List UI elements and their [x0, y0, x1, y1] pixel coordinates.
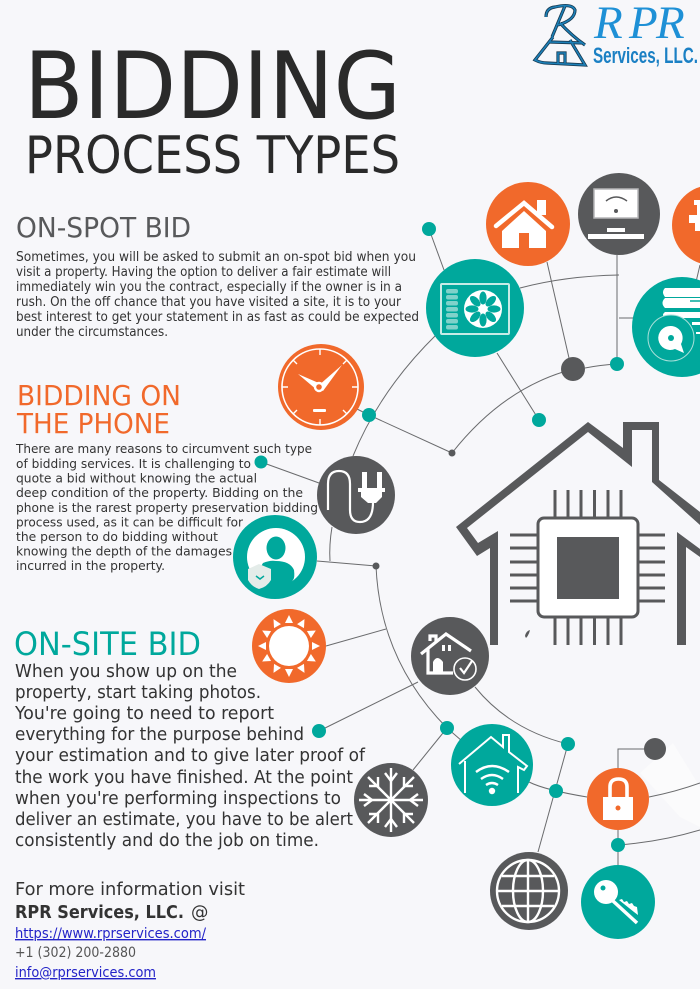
- text block: bidding on the phone: process used, as it can be difficult for: [16, 516, 244, 530]
- title: BIDDING: [24, 32, 401, 140]
- text block: bidding on the phone: phone is the rarest property preservation bidding: [16, 501, 318, 516]
- text block: on-site bid: [14, 662, 366, 851]
- icon: laptop: [578, 173, 660, 255]
- heading: bidding on the phone: THE PHONE: [16, 408, 170, 440]
- icon: home: [486, 182, 570, 266]
- text block: on-spot bid: under the circumstances.: [16, 325, 168, 340]
- text block: bidding on the phone: of bidding services. It is challenging to: [16, 457, 251, 472]
- heading: bidding on the phone: [16, 380, 181, 440]
- text block: on-site bid: You're going to need to report: [14, 704, 274, 724]
- text block: on-spot bid: Sometimes, you will be asked to submit an on-spot bid when you: [16, 250, 416, 265]
- text block: on-spot bid: rush. On the off chance that you have visited a site, it is to your: [16, 295, 402, 310]
- text block: on-spot bid: best interest to get your statement in as fast as could be expected: [16, 310, 419, 325]
- icon: key: [581, 865, 655, 939]
- heading: bidding on the phone: BIDDING ON: [17, 380, 181, 412]
- contact information: @: [191, 903, 208, 923]
- title: [24, 32, 401, 186]
- icon: snowflake: [354, 763, 428, 837]
- text block: on-site bid: when you're performing inspections to: [15, 789, 341, 809]
- contact information: +1 (302) 200-2880: [15, 945, 136, 961]
- icon: sun: [252, 609, 326, 683]
- house outline: [456, 422, 700, 645]
- icon: partial orange circle: [672, 185, 700, 265]
- text block: on-spot bid: visit a property. Having the option to deliver a fair estimate will: [16, 265, 391, 280]
- text block: bidding on the phone: knowing the depth of the damages: [16, 544, 232, 560]
- contact information: https://www.rprservices.com/: [15, 926, 206, 942]
- text block: on-site bid: When you show up on the: [15, 662, 237, 682]
- text block: bidding on the phone: deep condition of the property. Bidding on the: [16, 486, 303, 501]
- icon: person with shield: [233, 515, 317, 599]
- text block: bidding on the phone: the person to do bidding without: [16, 530, 218, 545]
- icon: power plug: [317, 456, 395, 534]
- text block: on-spot bid: immediately win you the contract, especially if the owner is in a: [16, 280, 402, 295]
- text block: on-site bid: the work you have finished. At the point: [15, 768, 353, 788]
- text block: on-spot bid: [16, 250, 419, 340]
- icon: chat with document stack: [632, 277, 700, 377]
- connector network: [261, 229, 700, 866]
- heading: on-site bid: ON-SITE BID: [14, 625, 201, 663]
- microchip: [510, 490, 665, 645]
- illustration: house with microchip: [456, 422, 700, 645]
- icon: air conditioner: [426, 259, 524, 357]
- small connector nodes: [254, 222, 666, 852]
- text block: on-site bid: property, start taking photos.: [15, 683, 261, 703]
- icon: house with check: [411, 617, 489, 695]
- text block: bidding on the phone: incurred in the property.: [16, 559, 165, 574]
- icon: smart home wifi: [451, 724, 533, 806]
- text block: bidding on the phone: There are many reasons to circumvent such type: [15, 442, 312, 457]
- text block: on-site bid: deliver an estimate, you have to be alert: [15, 810, 353, 830]
- icon: globe: [490, 852, 568, 930]
- text block: bidding on the phone: [15, 442, 318, 574]
- title: PROCESS TYPES: [25, 126, 400, 186]
- text block: bidding on the phone: quote a bid without knowing the actual: [16, 472, 257, 486]
- text block: on-site bid: your estimation and to give later proof of: [15, 746, 366, 766]
- contact information: [15, 880, 245, 981]
- heading: on-spot bid: ON-SPOT BID: [16, 212, 191, 244]
- contact information: RPR Services, LLC.: [15, 903, 184, 923]
- contact information: For more information visit: [15, 880, 245, 900]
- contact information: info@rprservices.com: [15, 965, 156, 981]
- icon: clock gauge: [278, 344, 364, 430]
- section: on-site bid: [14, 625, 366, 851]
- section: bidding on the phone: [15, 380, 318, 574]
- logo mark: [535, 6, 585, 65]
- icon: padlock: [587, 768, 649, 830]
- text block: on-site bid: everything for the purpose behind: [15, 725, 304, 745]
- logo: RPR Services: [535, 0, 698, 68]
- section: on-spot bid: [16, 212, 419, 340]
- text block: on-site bid: consistently and do the job on time.: [15, 831, 319, 851]
